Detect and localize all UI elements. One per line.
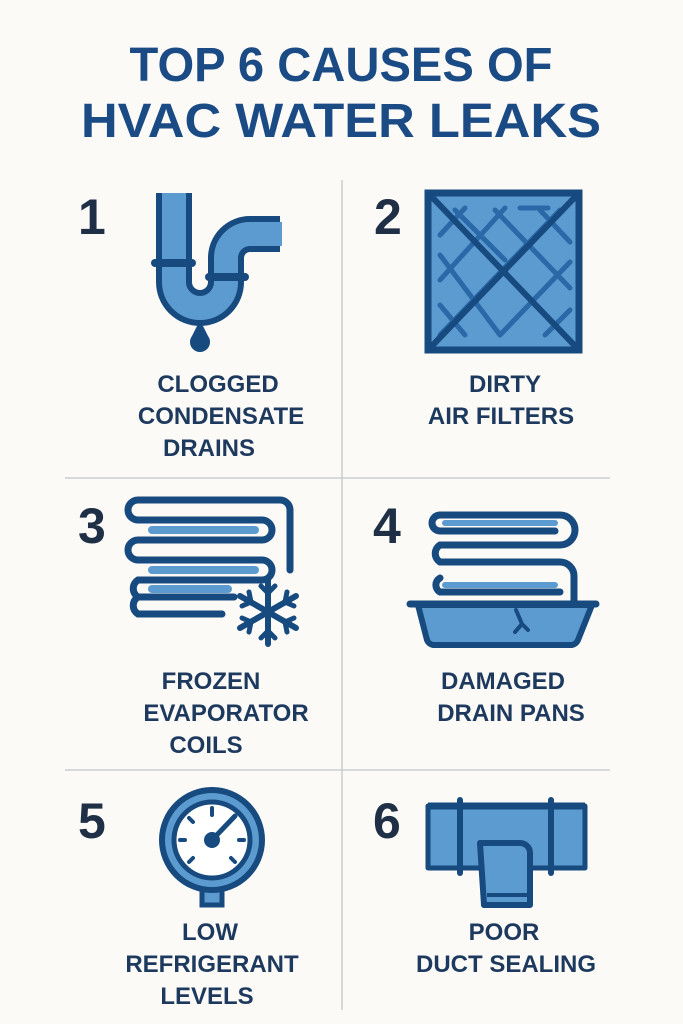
icon: air filter	[428, 193, 579, 350]
title: TOP 6 CAUSES OF	[130, 39, 552, 92]
icon: pipe trap	[155, 193, 282, 352]
labels: LEVELS	[160, 983, 254, 1010]
labels: LOW	[182, 919, 238, 946]
numbers: 6	[373, 793, 401, 849]
labels: DUCT SEALING	[416, 951, 596, 978]
title: HVAC WATER LEAKS	[81, 95, 601, 148]
labels: POOR	[469, 919, 539, 946]
numbers: 5	[78, 793, 106, 849]
labels: CLOGGED	[157, 371, 279, 398]
numbers	[78, 189, 402, 849]
icon: drain pan	[410, 515, 596, 645]
labels: REFRIGERANT	[125, 951, 299, 978]
numbers: 4	[373, 498, 401, 554]
labels: DRAIN PANS	[437, 700, 585, 727]
labels: FROZEN	[162, 668, 260, 695]
labels: AIR FILTERS	[428, 403, 574, 430]
labels: DIRTY	[469, 371, 541, 398]
numbers: 1	[78, 189, 106, 245]
labels	[125, 371, 596, 1010]
icon: gauge	[162, 790, 262, 905]
numbers: 2	[374, 189, 402, 245]
labels: DRAINS	[163, 435, 255, 462]
numbers: 3	[78, 498, 106, 554]
title	[81, 39, 601, 148]
icon: frozen coils	[128, 500, 296, 644]
labels: DAMAGED	[441, 668, 565, 695]
labels: EVAPORATOR	[143, 700, 309, 727]
labels: CONDENSATE	[138, 403, 304, 430]
icon: duct tee	[428, 800, 585, 905]
labels: COILS	[169, 732, 243, 759]
